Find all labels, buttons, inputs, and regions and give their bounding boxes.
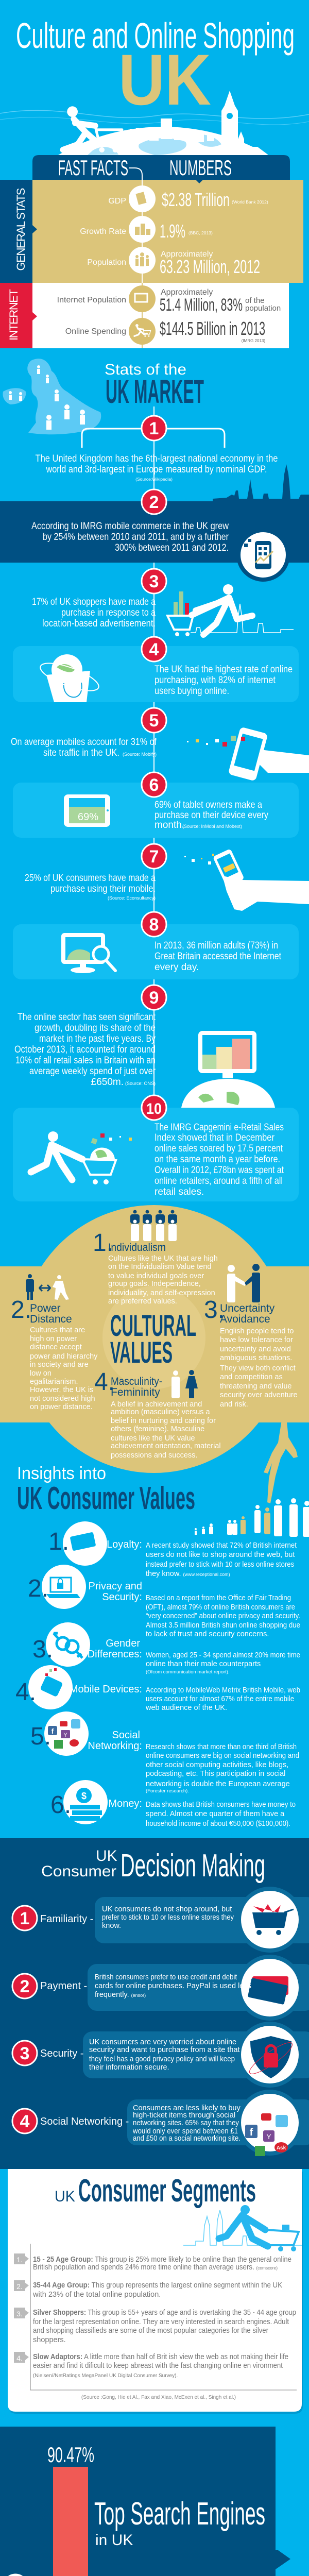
stat 10: e-retail sales: Index showed that in December bbox=[154, 1132, 275, 1143]
label: INTERNET: INTERNET bbox=[7, 289, 20, 341]
stat 3: location-based ads: 3 bbox=[149, 572, 159, 591]
consumer value 5: social networking: (Forester research). bbox=[146, 1788, 189, 1794]
stat 10: e-retail sales: on the same month a year before. bbox=[154, 1154, 280, 1165]
stat 3: location-based ads: purchase in response to a bbox=[61, 607, 156, 618]
value 2: power distance: Power bbox=[30, 1302, 61, 1314]
stat: internet population: Approximately bbox=[161, 288, 213, 297]
stat: growth rate: 1.9% bbox=[160, 221, 185, 242]
decision 3: security: 3 bbox=[20, 2044, 29, 2063]
stat 1: economy: (Source:Wikipedia) bbox=[135, 477, 173, 482]
value 2: power distance: not considered high bbox=[30, 1395, 95, 1403]
stat 6: tablets: (Source: InMobi and Mobext) bbox=[182, 824, 242, 829]
stat 9: online sector growth bbox=[14, 985, 275, 1108]
consumer value 5: social networking: Research shows that more than one third of British bbox=[146, 1743, 297, 1751]
heading: Insights into UK Consumer Values bbox=[17, 1464, 195, 1516]
stat 9: online sector growth: £650m. bbox=[91, 1077, 124, 1088]
consumer value 4: mobile devices: 4. bbox=[15, 1679, 36, 1706]
consumer value 6: money: household income of about €50,000 ($100,000). bbox=[146, 1820, 290, 1828]
stat 10: e-retail sales: online retailers, around a fifth of all bbox=[154, 1176, 283, 1187]
value 3: uncertainty avoidance: 3. bbox=[204, 1296, 225, 1324]
stat: GDP: (World Bank 2012) bbox=[232, 199, 268, 205]
value 2: power distance bbox=[11, 1274, 98, 1411]
stat: population: Approximately bbox=[161, 250, 213, 259]
segment 2: 35-44 Age Group: This group represents the largest online segment within the UK bbox=[33, 2281, 282, 2290]
decision 2: payment: cards for online purchases. PayPal is used less bbox=[95, 1982, 251, 1990]
value 2: power distance: distance accept bbox=[30, 1343, 82, 1351]
consumer value 2: privacy and security: Based on a report from the Office of Fair Trading bbox=[146, 1594, 291, 1602]
heading: Top Search Engines in UK: in UK bbox=[95, 2532, 133, 2549]
value 3: uncertainty avoidance: ambiguous situations. bbox=[220, 1354, 292, 1362]
stat 8: internet daily: 8 bbox=[149, 915, 159, 935]
segment 1: 15 - 25 Age Group: This group is 25% more likely to be online than the general online bbox=[33, 2256, 291, 2264]
consumer value 5: social networking: other social computing activities, like blogs, bbox=[146, 1761, 288, 1769]
illustration: blue shopper with skyline bbox=[183, 2205, 302, 2251]
consumer value 3: gender differences: online than their male counterparts bbox=[146, 1660, 261, 1668]
bar chart: search engine share: 90.47% bbox=[47, 2443, 94, 2467]
segment 1: British population and spends 24% more time online than average users. (comscore) bbox=[33, 2263, 278, 2272]
consumer value 6: money: $ bbox=[81, 1791, 87, 1801]
stat 5: mobile traffic: (Source: Mobify) bbox=[123, 752, 157, 757]
consumer value 3: gender differences: (Ofcom communication market report). bbox=[146, 1669, 230, 1675]
value 1: individualism: Cultures like the UK that are high bbox=[108, 1255, 218, 1263]
value 1: individualism: group goals. Independence, bbox=[108, 1280, 201, 1288]
value 2: power distance: high on power bbox=[30, 1335, 77, 1343]
stat 6: tablets: month. bbox=[154, 820, 184, 831]
consumer value 4: mobile devices: users account for almost 67% of the entire mobile bbox=[146, 1695, 294, 1703]
consumer value 5: social networking: Y bbox=[63, 1732, 67, 1738]
consumer value 2: privacy and security: 2. bbox=[28, 1575, 48, 1602]
segment 4: (Nielsen//NetRatings MegaPanel UK Digital Consumer Survey). bbox=[33, 2373, 178, 2379]
segment 1: 1. bbox=[16, 2256, 23, 2264]
stat: population bbox=[87, 247, 260, 277]
value 3: uncertainty avoidance: Uncertainty bbox=[220, 1302, 275, 1314]
decision 3: security: they feel has a good privacy policy and will keep bbox=[89, 2055, 235, 2063]
panel: UK consumer segments bbox=[8, 2169, 303, 2414]
icon: monitor bar chart on globe bbox=[181, 1031, 275, 1108]
consumer value 4: mobile devices bbox=[15, 1665, 300, 1712]
value 3: uncertainty avoidance: English people tend to bbox=[220, 1327, 294, 1335]
value 4: masculinity-femininity: belief in nurturing and caring for bbox=[111, 1417, 216, 1425]
decision 1: familiarity: Familiarity - bbox=[40, 1913, 93, 1925]
bar chart: search engine share bbox=[47, 2443, 259, 2576]
stat 1: economy: The United Kingdom has the 6th-largest national economy in the bbox=[35, 453, 278, 464]
stat 9: online sector growth: market in the past five years. By bbox=[39, 1033, 156, 1044]
stat 10: e-retail sales: The IMRG Capgemini e-Retail Sales bbox=[154, 1122, 284, 1133]
decision 4: social networking: networking sites. 65% say that they bbox=[133, 2119, 239, 2127]
illustration: globe skyline with shopper bbox=[0, 91, 309, 155]
value 3: uncertainty avoidance: and competition as bbox=[220, 1373, 283, 1381]
stat 7: mobile purchases bbox=[25, 844, 309, 911]
value 3: uncertainty avoidance: Avoidance bbox=[220, 1313, 270, 1325]
value 3: uncertainty avoidance: and risk. bbox=[220, 1400, 248, 1409]
stat 7: mobile purchases: purchase using their mobile. bbox=[50, 884, 156, 894]
segment 1 bbox=[14, 2253, 291, 2272]
decision 2: payment: British consumers prefer to use credit and debit bbox=[95, 1973, 237, 1981]
heading: Insights into UK Consumer Values: Insights into bbox=[17, 1464, 106, 1483]
stat 7: mobile purchases: 25% of UK consumers have made a bbox=[25, 873, 156, 884]
stat 5: mobile traffic: site traffic in the UK. bbox=[43, 748, 119, 758]
stat: GDP: GDP bbox=[108, 197, 126, 206]
value 1: individualism: 1. bbox=[93, 1229, 113, 1257]
consumer value 1: loyalty: Loyalty: bbox=[107, 1539, 142, 1550]
stat 2: mobile commerce bbox=[0, 489, 309, 582]
decision 4: social networking: Ask bbox=[277, 2145, 286, 2151]
stat: population: Population bbox=[87, 258, 126, 267]
value 3: uncertainty avoidance: have low tolerance for bbox=[220, 1336, 293, 1344]
panel: internet bbox=[0, 283, 289, 348]
value 1: individualism: Individualism bbox=[108, 1242, 166, 1253]
heading: UK Consumer Decision Making: UK bbox=[96, 1848, 117, 1865]
value 2: power distance: Distance bbox=[30, 1313, 72, 1325]
consumer value 5: social networking: f bbox=[52, 1727, 54, 1735]
value 4: masculinity-femininity: 4. bbox=[94, 1368, 115, 1396]
stat 8: internet daily: In 2013, 36 million adults (73%) in bbox=[154, 940, 278, 951]
value 4: masculinity-femininity: ambition (masculine) versus a bbox=[111, 1408, 211, 1416]
segment 2 bbox=[14, 2280, 282, 2299]
value 3: uncertainty avoidance: They view both conflict bbox=[220, 1364, 296, 1372]
stat: growth rate: (BBC, 2013) bbox=[188, 230, 213, 235]
value 4: masculinity-femininity: possessions and success. bbox=[111, 1451, 197, 1460]
stat 8: internet daily: Great Britain accessed the Internet bbox=[154, 951, 282, 962]
icon: monitor with magnifier bbox=[61, 933, 115, 973]
stat 7: mobile purchases: 7 bbox=[149, 847, 159, 867]
icon: hand with phone bbox=[184, 849, 309, 911]
illustration: hand picking people bbox=[195, 1417, 309, 1537]
stat 9: online sector growth: 10% of all retail sales in Britain with an bbox=[15, 1055, 156, 1066]
segment 4 bbox=[14, 2352, 288, 2379]
segment 3: 3. bbox=[16, 2310, 23, 2318]
stat 3: location-based ads bbox=[32, 569, 294, 636]
stat: internet population: 51.4 Million, 83% bbox=[160, 295, 243, 315]
decision 3: security: UK consumers are very worried about online bbox=[89, 2038, 236, 2046]
segment 3: and shopping classifieds are some of the most popular categories for the silver bbox=[33, 2327, 268, 2335]
stat 9: online sector growth: (Source: ONS) bbox=[125, 1081, 156, 1086]
stat 4: online purchasing: purchasing, with 82% of internet bbox=[154, 675, 276, 686]
consumer value 5: social networking: 5. bbox=[30, 1723, 51, 1750]
value 2: power distance: 2. bbox=[11, 1296, 31, 1324]
decision 1: familiarity: prefer to stick to 10 or less online stores they bbox=[102, 1913, 234, 1922]
value 4: masculinity-femininity bbox=[94, 1368, 221, 1460]
stat 10: e-retail sales: online sales soared by 17.5 percent bbox=[154, 1143, 283, 1154]
text: UK MARKET bbox=[106, 373, 204, 410]
decision 4: social networking: f bbox=[250, 2127, 253, 2138]
stat 9: online sector growth: average weekly spend of just over bbox=[29, 1066, 156, 1077]
stat 3: location-based ads: location-based advertisement. bbox=[42, 618, 156, 629]
stat 1: economy: 1 bbox=[149, 419, 159, 438]
stat 10: e-retail sales: 10 bbox=[146, 1100, 162, 1117]
consumer value 3: gender differences: Gender bbox=[106, 1638, 140, 1649]
heading: Stats of the UK Market bbox=[105, 361, 204, 410]
decision 4: social networking: Social Networking - bbox=[40, 2116, 129, 2127]
source: segments: (Source :Gong, Hie et Al., Fax and Xiao, McExen et al., Singh et al.) bbox=[81, 2395, 236, 2400]
icon: tablet 69% bbox=[64, 794, 110, 827]
stat 9: online sector growth: The online sector has seen significant bbox=[18, 1012, 156, 1023]
illustration: skyline silhouette bbox=[213, 464, 309, 502]
stat 6: tablets bbox=[13, 772, 299, 838]
consumer value 5: social networking: podcasting, etc. This participation in social bbox=[146, 1770, 285, 1778]
value 2: power distance: in society and are bbox=[30, 1361, 89, 1369]
heading: CULTURAL VALUES: CULTURAL bbox=[110, 1309, 196, 1343]
value 1: individualism bbox=[93, 1210, 218, 1306]
consumer value 6: money: Data shows that British consumers have money to bbox=[146, 1801, 296, 1809]
decision 4: social networking: Y bbox=[266, 2132, 271, 2141]
stat 8: internet daily: every day. bbox=[154, 962, 199, 973]
stat 1: economy bbox=[35, 416, 278, 482]
decision 3: security bbox=[12, 2022, 309, 2088]
consumer value 2: privacy and security bbox=[28, 1565, 300, 1638]
consumer value 5: social networking: online consumers are big on social networking and bbox=[146, 1752, 299, 1760]
stat 10: e-retail sales: retail sales. bbox=[154, 1187, 204, 1197]
stat 9: online sector growth: 9 bbox=[149, 988, 159, 1008]
stat 5: mobile traffic bbox=[11, 708, 309, 782]
consumer value 5: social networking: networking is double the European average bbox=[146, 1780, 290, 1788]
consumer value 2: privacy and security: Security: bbox=[102, 1591, 142, 1603]
stat: internet population: Internet Population bbox=[57, 296, 126, 304]
stat 9: online sector growth: growth, doubling its share of the bbox=[35, 1023, 156, 1033]
value 2: power distance: on power distance. bbox=[30, 1403, 93, 1411]
consumer value 6: money: Money: bbox=[108, 1798, 142, 1809]
decision 1: familiarity: UK consumers do not shop around, but bbox=[102, 1905, 232, 1913]
decision 1: familiarity: know. bbox=[102, 1922, 121, 1930]
value 4: masculinity-femininity: cultures like the UK value bbox=[111, 1434, 195, 1443]
consumer value 3: gender differences: 3. bbox=[32, 1636, 53, 1663]
panel: fast facts header bbox=[32, 155, 290, 180]
consumer value 1: loyalty: users do not like to shop around the web, but bbox=[146, 1551, 295, 1559]
panel: top search engines bbox=[0, 2427, 290, 2576]
label: GENERAL STATS: GENERAL STATS bbox=[14, 188, 27, 271]
value 4: masculinity-femininity: achievement orientation, material bbox=[111, 1442, 221, 1450]
icon: shopper with cart and skyline bbox=[167, 584, 294, 636]
consumer value 5: social networking: Networking: bbox=[88, 1740, 142, 1752]
segment 2: with 23% of the total online population. bbox=[32, 2291, 161, 2299]
consumer value 2: privacy and security: (OFT), almost 79% of online British consumers are bbox=[146, 1603, 295, 1612]
value 2: power distance: low on bbox=[30, 1369, 52, 1378]
stat: internet population bbox=[57, 285, 281, 315]
icon: runner with globe cart bbox=[31, 1131, 132, 1184]
consumer value 3: gender differences: Differences: bbox=[88, 1649, 142, 1660]
consumer value 6: money: 6. bbox=[50, 1791, 71, 1819]
stat: growth rate bbox=[80, 216, 213, 243]
value 2: power distance: However, the UK is bbox=[30, 1386, 93, 1394]
segment 2: 2. bbox=[16, 2282, 23, 2291]
segment 3: for the largest representation online. They are very interested in search engines. Adult bbox=[33, 2318, 289, 2326]
consumer value 1: loyalty: A recent study showed that 72% of British internet bbox=[146, 1541, 297, 1550]
stat 1: economy: world and 3rd-largest in Europe measured by nominal GDP. bbox=[46, 464, 267, 475]
stat: GDP: $2.38 Trillion bbox=[162, 189, 230, 210]
decision 2: payment: 2 bbox=[20, 1977, 29, 1996]
stat 10: e-retail sales: Overall in 2012, £78bn was spent at bbox=[154, 1165, 284, 1176]
value 3: uncertainty avoidance: security over adventure bbox=[220, 1391, 298, 1399]
stat 2: mobile commerce: 2 bbox=[149, 493, 159, 512]
decision 1: familiarity: 1 bbox=[20, 1909, 29, 1928]
value 1: individualism: are preferred values. bbox=[108, 1297, 177, 1306]
stat 2: mobile commerce: According to IMRG mobile commerce in the UK grew bbox=[31, 521, 229, 532]
stat 5: mobile traffic: 5 bbox=[149, 711, 159, 731]
stat 4: online purchasing bbox=[13, 637, 299, 702]
decision 2: payment: frequently. (ensor) bbox=[95, 1991, 146, 1999]
consumer value 6: money: spend. Almost one quarter of them have a bbox=[146, 1810, 285, 1818]
stat 9: online sector growth: October 2013, it accounted for around bbox=[14, 1044, 156, 1055]
value 1: individualism: on the Individualism Value tend bbox=[108, 1263, 211, 1271]
stat 5: mobile traffic: On average mobiles account for 31% of bbox=[11, 737, 157, 748]
decision 3: security: Security - bbox=[40, 2048, 83, 2059]
value 4: masculinity-femininity: others (feminine). Masculine bbox=[111, 1425, 204, 1433]
stat 2: mobile commerce: by 254% between 2010 and 2011, and by a further bbox=[43, 532, 229, 543]
value 2: power distance: power and hierarchy bbox=[30, 1352, 98, 1361]
decision 4: social networking: 4 bbox=[20, 2112, 30, 2131]
consumer value 2: privacy and security: Privacy and bbox=[89, 1581, 142, 1592]
stat 10: e-retail sales bbox=[13, 1095, 299, 1201]
value 2: power distance: Cultures that are bbox=[30, 1326, 85, 1334]
heading: CULTURAL VALUES bbox=[110, 1309, 196, 1369]
stat 4: online purchasing: users buying online. bbox=[154, 686, 229, 697]
decision 4: social networking: high-ticket items through social bbox=[133, 2111, 235, 2120]
heading: UK Consumer Decision Making: Consumer bbox=[41, 1863, 116, 1880]
decision 4: social networking: and £50 on a social networking site. bbox=[133, 2134, 241, 2143]
decision 2: payment: Payment - bbox=[40, 1980, 87, 1992]
stat: internet population: population bbox=[245, 304, 281, 313]
value 1: individualism: individuality, and self-expression bbox=[108, 1289, 215, 1297]
heading: UK Consumer Segments bbox=[55, 2173, 256, 2209]
decision 2: payment bbox=[12, 1955, 309, 2021]
stat 3: location-based ads: 17% of UK shoppers have made a bbox=[32, 597, 156, 607]
value 4: masculinity-femininity: Masculinity- bbox=[111, 1376, 162, 1387]
heading: Top Search Engines in UK bbox=[94, 2496, 265, 2549]
value 3: uncertainty avoidance bbox=[204, 1264, 298, 1409]
consumer value 4: mobile devices: web audience of the UK. bbox=[145, 1704, 227, 1712]
heading: Stats of the UK Market: Stats of the bbox=[105, 361, 186, 378]
heading: FAST FACTS: FAST FACTS bbox=[58, 156, 128, 180]
icon: hand holding phone bbox=[187, 727, 309, 782]
consumer value 6: money bbox=[50, 1780, 296, 1828]
panel: UK consumer decision making bbox=[0, 1838, 309, 2169]
consumer value 4: mobile devices: According to MobileWeb Metrix British Mobile, web bbox=[146, 1686, 300, 1694]
value 2: power distance: egalitarianism. bbox=[30, 1378, 78, 1386]
heading: NUMBERS: NUMBERS bbox=[169, 156, 232, 180]
segment 3 bbox=[14, 2308, 296, 2344]
heading: CULTURAL VALUES: VALUES bbox=[110, 1336, 173, 1369]
segment 4: Slow Adaptors: A little more than half of Brit ish view the web as not making their life bbox=[33, 2353, 288, 2361]
value 3: uncertainty avoidance: threatening and value bbox=[220, 1382, 291, 1391]
stat 2: mobile commerce: 300% between 2011 and 2012. bbox=[115, 543, 229, 553]
stat: online spending: Online Spending bbox=[65, 327, 126, 336]
decision 4: social networking: Consumers are less likely to buy bbox=[133, 2104, 241, 2112]
stat: internet population: of the bbox=[245, 296, 265, 305]
segment 4: 4. bbox=[16, 2354, 23, 2362]
stat 6: tablets: 6 bbox=[149, 775, 159, 795]
consumer value 1: loyalty: 1. bbox=[48, 1528, 69, 1555]
value 1: individualism: to value individual goals over bbox=[108, 1272, 204, 1280]
consumer value 4: mobile devices: Mobile Devices: bbox=[70, 1684, 142, 1695]
consumer value 1: loyalty: they know. (www.receptional.com) bbox=[146, 1570, 230, 1578]
value 4: masculinity-femininity: Femininity bbox=[111, 1386, 160, 1398]
consumer value 1: loyalty: instead prefer to stick with 10 or less online stores bbox=[146, 1561, 294, 1569]
consumer value 3: gender differences bbox=[32, 1622, 300, 1675]
icon: globe shopping bag bbox=[37, 654, 102, 702]
stat 6: tablets: purchase on their device every bbox=[154, 810, 268, 821]
value 3: uncertainty avoidance: uncertainty and avoid bbox=[220, 1345, 291, 1353]
stat: growth rate: Growth Rate bbox=[80, 227, 126, 236]
panel: cultural values bbox=[0, 1205, 309, 1473]
value 4: masculinity-femininity: A belief in achievement and bbox=[111, 1400, 202, 1409]
stat: online spending bbox=[65, 318, 265, 345]
decision 4: social networking bbox=[12, 2090, 309, 2156]
stat: online spending: (IMRG 2013) bbox=[242, 338, 265, 343]
stat: GDP bbox=[108, 185, 268, 212]
heading: UK Consumer Decision Making bbox=[41, 1848, 265, 1884]
title: UK: UK bbox=[118, 39, 211, 120]
consumer value 1: loyalty bbox=[48, 1521, 297, 1578]
decision 4: social networking: would only ever spend between £1 bbox=[132, 2127, 238, 2136]
stat 4: online purchasing: 4 bbox=[149, 640, 159, 659]
stat 6: tablets: 69% of tablet owners make a bbox=[154, 800, 262, 810]
icon: tablet 69%: 69% bbox=[78, 811, 98, 823]
panel: general stats bbox=[0, 168, 303, 283]
decision 3: security: security and want to purchase from a site that bbox=[89, 2046, 240, 2054]
segment 3: shoppers. bbox=[33, 2336, 66, 2344]
consumer value 5: social networking: Social bbox=[112, 1730, 140, 1741]
stat 7: mobile purchases: (Source: Econsultancy) bbox=[108, 895, 156, 901]
decision 1: familiarity bbox=[12, 1887, 309, 1953]
icon: phone chart bbox=[236, 528, 290, 582]
consumer value 2: privacy and security: to lack of trust and security concerns. bbox=[146, 1630, 269, 1638]
illustration: man with magnifier bbox=[4, 2575, 34, 2576]
consumer value 5: social networking bbox=[30, 1711, 299, 1794]
segment 4: easier and find it dificult to keep abreast with the fast changing online en vironment bbox=[33, 2362, 283, 2370]
stat 8: internet daily bbox=[13, 912, 299, 979]
timeline connector bbox=[153, 406, 154, 1113]
illustration: UK map with people bbox=[3, 359, 101, 434]
heading: UK Consumer Segments: UK bbox=[55, 2188, 75, 2205]
decision 3: security: their information secure. bbox=[89, 2063, 169, 2072]
